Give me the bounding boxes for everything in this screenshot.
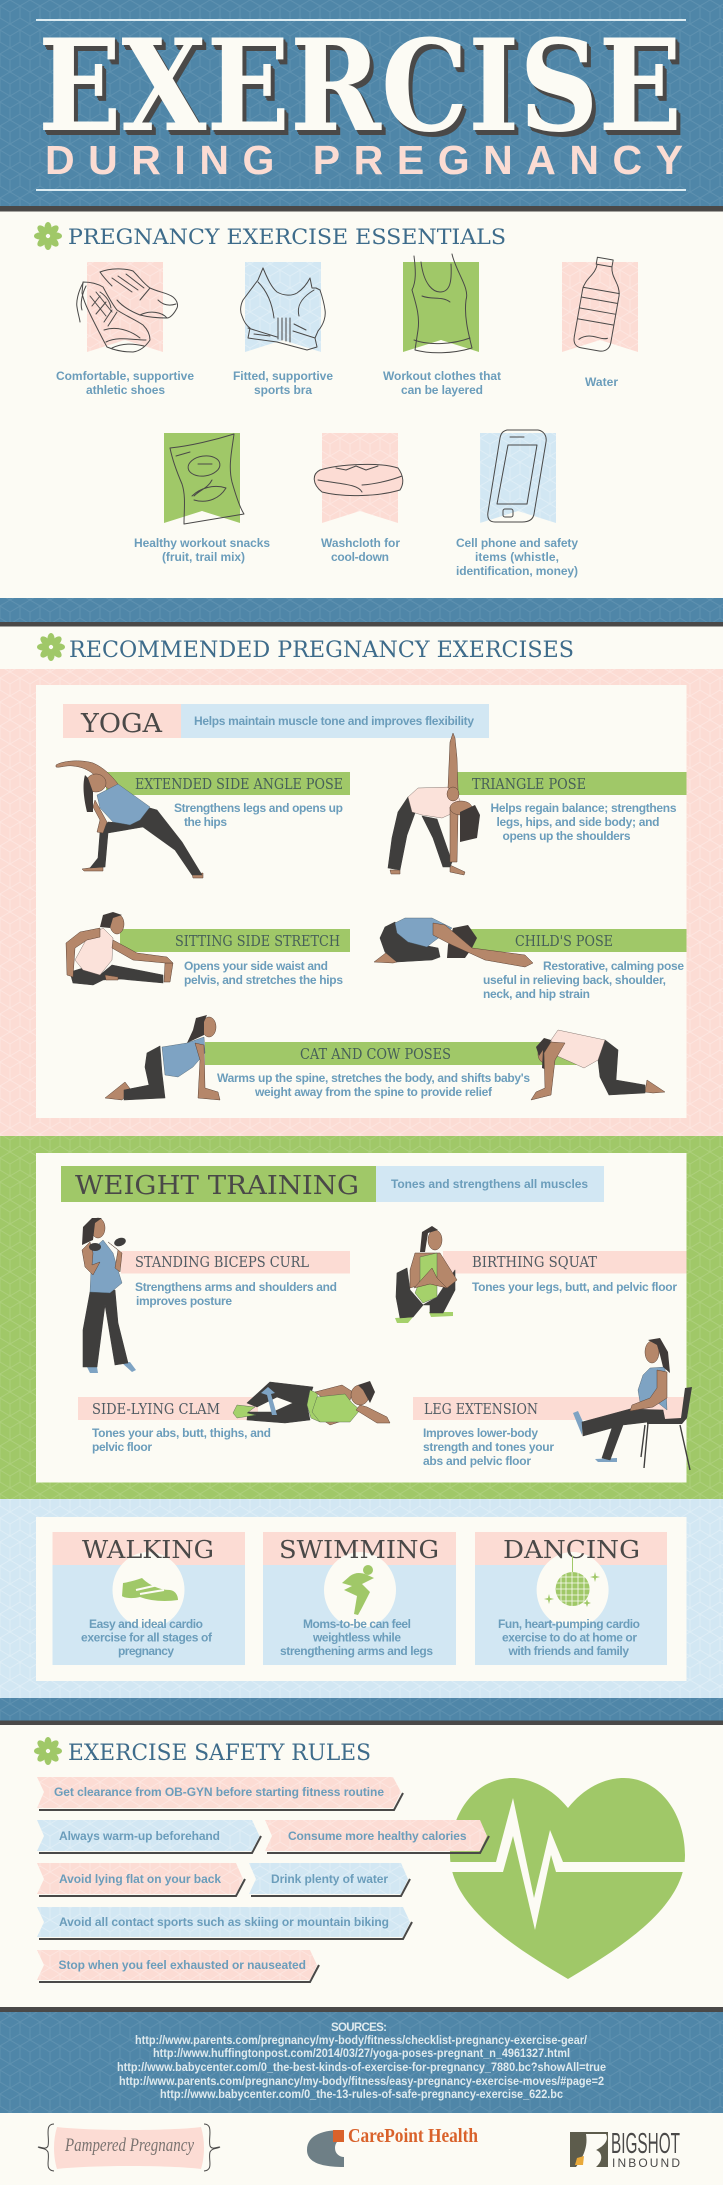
essential: cell phone: items (whistle, xyxy=(475,550,559,564)
weight: standing biceps curl: Strengthens arms and shoulders and xyxy=(135,1280,337,1294)
weight: leg extension: LEG EXTENSION xyxy=(424,1402,538,1418)
yoga: triangle pose: Helps regain balance; strengthens xyxy=(490,801,677,815)
yoga: sitting side stretch: SITTING SIDE STRETCH xyxy=(175,934,340,950)
yoga header xyxy=(63,704,489,739)
card: walking: WALKING xyxy=(82,1536,214,1564)
essential: shoes: athletic shoes xyxy=(86,383,165,397)
card: swimming: Moms-to-be can feel xyxy=(303,1617,411,1631)
blue divider band xyxy=(0,1698,723,1725)
yoga: child's pose xyxy=(374,918,686,1001)
weight: leg extension xyxy=(413,1338,692,1470)
panel: weight training xyxy=(0,1136,723,1499)
yoga: cat and cow poses: weight away from the spine to provide relief xyxy=(254,1085,493,1099)
essential: cell phone: Cell phone and safety xyxy=(456,536,578,550)
essential: shoes xyxy=(56,262,194,397)
sources band xyxy=(0,2007,723,2113)
card: swimming: SWIMMING xyxy=(279,1536,439,1564)
card: swimming: strengthening arms and legs xyxy=(280,1644,433,1658)
logo: Pampered Pregnancy: Pampered Pregnancy xyxy=(64,2135,194,2156)
weight: birthing squat xyxy=(395,1226,686,1323)
rule 1 xyxy=(37,1777,403,1810)
panel: cardio xyxy=(0,1499,723,1698)
card: dancing: exercise to do at home or xyxy=(502,1630,637,1644)
card: swimming xyxy=(263,1532,456,1665)
essential: snack bag xyxy=(134,433,270,564)
rule 4 xyxy=(37,1863,245,1896)
header banner xyxy=(0,0,723,212)
yoga: extended side angle pose: EXTENDED SIDE ANGLE POSE xyxy=(135,777,343,793)
rule 7 xyxy=(37,1950,319,1982)
icon: swimmer xyxy=(342,1565,374,1615)
logo: Pampered Pregnancy xyxy=(38,2124,220,2171)
rule 1: Get clearance from OB-GYN before starting fitness routine xyxy=(54,1785,384,1799)
yoga: cat and cow poses: Warms up the spine, stretches the body, and shifts baby's xyxy=(217,1071,530,1085)
logo: Bigshot Inbound: INBOUND xyxy=(612,2156,680,2170)
section heading: safety rules: EXERCISE SAFETY RULES xyxy=(68,1741,371,1766)
yoga: triangle pose: opens up the shoulders xyxy=(502,829,631,843)
logo: CarePoint Health xyxy=(307,2125,478,2167)
yoga: child's pose: Restorative, calming pose xyxy=(543,959,684,973)
essential: washcloth xyxy=(314,433,403,564)
essential: sports bra: sports bra xyxy=(254,383,312,397)
weight: side-lying clam: pelvic floor xyxy=(92,1440,152,1454)
weight: birthing squat: BIRTHING SQUAT xyxy=(472,1255,597,1271)
yoga: extended side angle pose: the hips xyxy=(184,815,227,829)
card: walking: exercise for all stages of xyxy=(81,1630,213,1644)
heart with heartbeat xyxy=(445,1778,690,1979)
rule 6: Avoid all contact sports such as skiing or mountain biking xyxy=(59,1915,389,1929)
rule 5 xyxy=(249,1863,410,1896)
weight: side-lying clam xyxy=(78,1381,390,1454)
yoga: sitting side stretch: pelvis, and stretches the hips xyxy=(184,973,343,987)
essential: tank top: can be layered xyxy=(401,383,483,397)
weight header xyxy=(61,1166,604,1202)
weight: standing biceps curl: STANDING BICEPS CURL xyxy=(135,1255,309,1271)
yoga: child's pose: useful in relieving back, shoulder, xyxy=(483,973,666,987)
yoga header: Helps maintain muscle tone and improves flexibility xyxy=(194,714,474,728)
weight: standing biceps curl: improves posture xyxy=(136,1294,232,1308)
weight: leg extension: strength and tones your xyxy=(423,1440,554,1454)
essential: water bottle xyxy=(562,256,638,389)
yoga: cat and cow poses xyxy=(105,1015,665,1100)
weight header: WEIGHT TRAINING xyxy=(75,1171,359,1201)
essential: shoes: Comfortable, supportive xyxy=(56,369,194,383)
sources band: http://www.parents.com/pregnancy/my-body/fitness/checklist-pregnancy-exercise-gear/ xyxy=(135,2035,588,2047)
essential: washcloth: Washcloth for xyxy=(321,536,400,550)
rule 6 xyxy=(37,1907,412,1939)
essential: sports bra: Fitted, supportive xyxy=(233,369,333,383)
yoga: extended side angle pose: Strengthens legs and opens up xyxy=(174,801,343,815)
weight: leg extension: Improves lower-body xyxy=(423,1426,538,1440)
subtitle: during pregnancy: DURING PREGNANCY xyxy=(45,137,683,183)
card: swimming: weightless while xyxy=(312,1630,401,1644)
yoga: sitting side stretch xyxy=(66,912,350,987)
section heading: recommended exercises: RECOMMENDED PREGNANCY EXERCISES xyxy=(69,638,574,663)
yoga: triangle pose xyxy=(388,733,686,875)
rule 2 xyxy=(37,1820,261,1853)
weight: standing biceps curl xyxy=(82,1218,350,1373)
icon: shoe xyxy=(122,1578,178,1601)
essential: cell phone: identification, money) xyxy=(456,564,578,578)
essential: sports bra xyxy=(233,262,333,397)
weight: birthing squat: Tones your legs, butt, and pelvic floor xyxy=(472,1280,677,1294)
rule 7: Stop when you feel exhausted or nauseated xyxy=(58,1958,306,1972)
panel: yoga xyxy=(0,669,723,1136)
weight header: Tones and strengthens all muscles xyxy=(391,1177,588,1191)
sources band: http://www.parents.com/pregnancy/my-body/fitness/easy-pregnancy-exercise-moves/#page=2 xyxy=(119,2076,604,2088)
essential: tank top: Workout clothes that xyxy=(383,369,501,383)
sources band: http://www.huffingtonpost.com/2014/03/27/yoga-poses-pregnant_n_4961327.html xyxy=(153,2048,570,2060)
card: dancing: with friends and family xyxy=(508,1644,629,1658)
logo: CarePoint Health: CarePoint Health xyxy=(348,2125,478,2147)
essential: tank top xyxy=(383,254,501,397)
icon: disco ball xyxy=(544,1556,600,1607)
logo: Bigshot Inbound xyxy=(570,2128,680,2170)
yoga: child's pose: CHILD'S POSE xyxy=(515,934,613,950)
card: dancing: Fun, heart-pumping cardio xyxy=(498,1617,640,1631)
card: dancing: DANCING xyxy=(503,1536,640,1564)
essential: cell phone xyxy=(456,430,578,578)
card: walking: Easy and ideal cardio xyxy=(89,1617,203,1631)
rule 3: Consume more healthy calories xyxy=(288,1829,467,1843)
essential: water bottle: Water xyxy=(585,375,618,389)
section heading: essentials: PREGNANCY EXERCISE ESSENTIALS xyxy=(68,225,506,249)
rule 3 xyxy=(265,1820,489,1853)
yoga: extended side angle pose xyxy=(56,761,350,878)
yoga: sitting side stretch: Opens your side waist and xyxy=(184,959,328,973)
weight: leg extension: abs and pelvic floor xyxy=(423,1454,531,1468)
rule 4: Avoid lying flat on your back xyxy=(59,1872,221,1886)
rule 2: Always warm-up beforehand xyxy=(59,1829,220,1843)
yoga: triangle pose: TRIANGLE POSE xyxy=(472,777,586,793)
yoga: child's pose: neck, and hip strain xyxy=(483,987,590,1001)
card: dancing xyxy=(475,1532,667,1665)
sources band: http://www.babycenter.com/0_the-best-kinds-of-exercise-for-pregnancy_7880.bc?showAll=true xyxy=(117,2062,606,2074)
essential: snack bag: (fruit, trail mix) xyxy=(162,550,245,564)
yoga header: YOGA xyxy=(80,709,163,739)
yoga: triangle pose: legs, hips, and side body; and xyxy=(496,815,660,829)
yoga: cat and cow poses: CAT AND COW POSES xyxy=(300,1047,451,1063)
card: walking: pregnancy xyxy=(118,1644,174,1658)
sources band: http://www.babycenter.com/0_the-13-rules-of-safe-pregnancy-exercise_622.bc xyxy=(160,2089,564,2101)
rule 5: Drink plenty of water xyxy=(271,1872,388,1886)
weight: side-lying clam: SIDE-LYING CLAM xyxy=(92,1402,220,1418)
blue divider band xyxy=(0,598,723,626)
weight: side-lying clam: Tones your abs, butt, thighs, and xyxy=(92,1426,271,1440)
card: walking xyxy=(52,1532,245,1665)
essential: washcloth: cool-down xyxy=(331,550,389,564)
essential: snack bag: Healthy workout snacks xyxy=(134,536,270,550)
sources band: SOURCES: xyxy=(331,2022,387,2034)
